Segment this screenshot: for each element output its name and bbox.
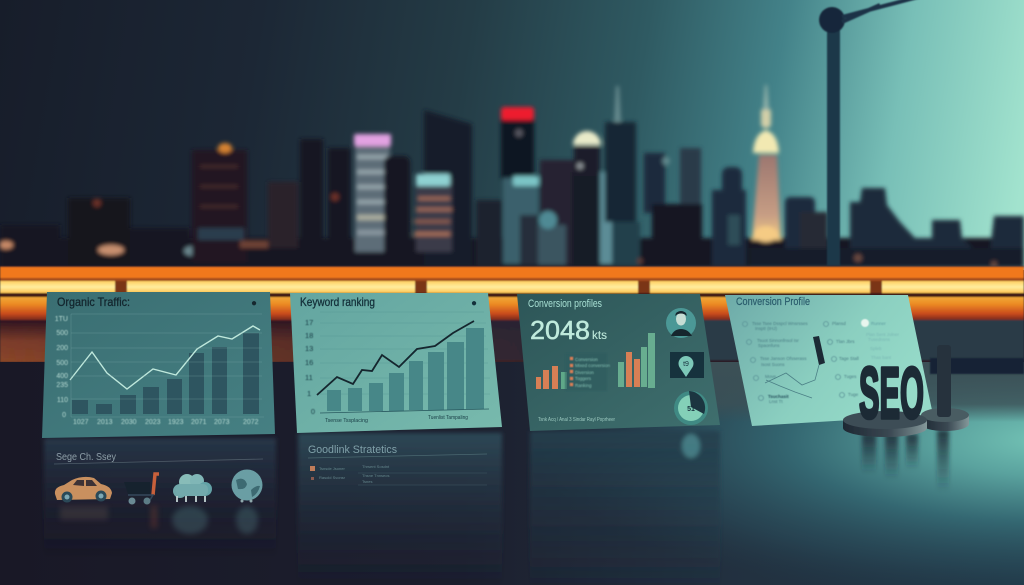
checklist: left column: Inspt! (tHJ) <box>755 326 778 331</box>
heading: keyword ranking: Keyword ranking <box>300 295 375 309</box>
checklist: right column <box>861 319 900 360</box>
checklist: left column: Move <box>765 374 777 379</box>
gridlines <box>320 312 490 394</box>
y axis labels: 500 <box>56 360 68 367</box>
icon: location pin tile: t9 <box>683 361 689 368</box>
icon: card controls: ● <box>471 298 477 309</box>
checklist: middle column: Tlan Jbrs <box>836 339 855 344</box>
legend rows: Thsne Tnnseos <box>362 473 390 478</box>
label: backlink strategies <box>308 444 487 485</box>
y axis labels: 1 <box>307 389 311 398</box>
line chart: keyword trend <box>317 321 474 395</box>
checklist: left column: Tsuot Sinnonfnsol Isr <box>757 338 799 343</box>
checklist: right column: Runner <box>871 321 886 326</box>
x axis captions: Tuenlist Tampaling <box>428 415 468 421</box>
x axis captions <box>325 415 468 424</box>
legend rows: Tsnes <box>362 479 372 484</box>
legend rows <box>310 464 487 485</box>
x axis labels <box>73 419 259 426</box>
background sky <box>0 0 1024 270</box>
icon: card controls: ● <box>251 298 257 309</box>
line chart: profile trend <box>765 365 819 398</box>
checklist: right column: Spleb <box>870 346 882 351</box>
panel: keyword ranking card <box>290 293 502 433</box>
checklist: middle column: Tuges <box>844 374 857 379</box>
x axis labels: 2073 <box>214 419 230 426</box>
x axis captions: Tsense Tssplacing <box>325 418 368 424</box>
glowing orange band <box>0 266 1024 366</box>
x axis labels: 2023 <box>145 419 161 426</box>
panel: organic traffic card <box>42 292 275 438</box>
legend <box>565 353 611 391</box>
big number: kts <box>592 328 607 342</box>
y axis labels: 16 <box>305 358 313 367</box>
checklist: right column: Thas bant <box>871 355 892 360</box>
checklist: middle column <box>824 321 859 398</box>
icon: shopping cart <box>124 474 159 504</box>
big number: 2048 <box>530 315 590 345</box>
right disc <box>921 408 969 431</box>
checklist: left column: Tsuchasit <box>768 394 789 399</box>
seo pillar <box>937 345 951 417</box>
city skyline <box>0 85 1024 268</box>
text: SEO <box>859 354 924 434</box>
legend: Conversion <box>575 357 598 362</box>
chart axes and gridlines <box>71 314 264 417</box>
checklist: middle column: Tuge <box>848 392 859 397</box>
caption: Tsnk Acq / Anal 3 Sindar Rayl Poprheer <box>538 417 615 423</box>
heading: conversion profiles: Conversion profiles <box>528 298 602 310</box>
icon: cloud <box>173 474 212 502</box>
chart baseline <box>320 409 489 413</box>
x axis labels: 2013 <box>97 419 113 426</box>
y axis labels <box>55 316 68 419</box>
y axis labels: 18 <box>305 331 313 340</box>
x axis labels: 2071 <box>191 419 207 426</box>
y axis labels: 11 <box>305 373 313 382</box>
dark reflective table <box>0 358 1024 585</box>
y axis labels: 13 <box>305 344 313 353</box>
y axis labels: 400 <box>56 373 68 380</box>
line chart: traffic trend <box>70 326 260 389</box>
checklist: left column <box>742 321 808 404</box>
street lamp pole <box>819 0 922 268</box>
dark slanted marker <box>813 336 825 365</box>
checklist: middle column: Tage Stall <box>839 356 859 361</box>
icon reflections <box>60 506 258 534</box>
checklist: left column: Tsse Tsee Dsspcl Wnsrsses <box>752 321 808 326</box>
y axis labels: 0 <box>62 412 66 419</box>
y axis labels: 500 <box>56 330 68 337</box>
y axis labels: 200 <box>56 345 68 352</box>
bar chart: large bars <box>618 333 655 388</box>
x axis labels: 1923 <box>168 419 184 426</box>
y axis labels: 110 <box>57 397 68 404</box>
legend: Mixed conversion <box>575 363 611 368</box>
x axis labels: 1027 <box>73 419 89 426</box>
base discs <box>843 408 969 437</box>
label: sege strategy <box>54 451 263 464</box>
legend: Ranking <box>575 383 592 388</box>
x axis labels: 2072 <box>243 419 259 426</box>
icon: location pin tile <box>670 352 704 378</box>
icon: pie chart: 51 <box>687 406 695 413</box>
bar chart: keyword bars <box>327 328 484 411</box>
left disc <box>843 411 927 437</box>
y axis labels: 17 <box>305 318 313 327</box>
label: backlink strategies: Goodlink Stratetics <box>308 444 397 456</box>
y axis labels: 1TU <box>55 316 68 323</box>
heading: organic traffic: Organic Traffic: <box>57 295 130 309</box>
checklist: left column: Spaonfuns <box>758 343 780 348</box>
icon: car <box>55 477 112 502</box>
heading: conversion profile: Conversion Profile <box>736 296 810 308</box>
label: sege strategy: Sege Ch. Ssey <box>56 451 117 463</box>
panel: conversion stats card <box>517 294 720 431</box>
legend rows: Tsnsde Jsoner <box>319 466 345 471</box>
legend rows: Rasold Svonsr <box>319 475 346 480</box>
legend rows: Thrsent Sosdnt <box>362 464 390 469</box>
icon: pie chart <box>674 391 708 425</box>
card reflections on table <box>44 430 949 585</box>
legend: Toggers <box>575 376 592 381</box>
checklist: right column: Plan Sent Jolner <box>866 332 900 337</box>
checklist: middle column: Plansd <box>832 321 846 326</box>
y axis labels: 0 <box>311 407 315 416</box>
bar chart: small bars <box>536 366 567 389</box>
legend: Diversion <box>575 370 594 375</box>
checklist: right column: Tusednsns <box>868 337 891 342</box>
icon: globe <box>232 470 262 502</box>
bar chart: traffic bars <box>72 333 259 414</box>
checklist: left column: Lnst Tt <box>769 399 783 404</box>
y axis labels <box>305 318 315 416</box>
x axis labels: 2030 <box>121 419 137 426</box>
checklist: left column: Isost Suons <box>761 362 785 367</box>
icon: user avatar <box>666 308 696 338</box>
panel: conversion profile card <box>725 295 933 426</box>
checklist: left column: Tsse Janson Ofsserass <box>760 356 807 361</box>
y axis labels: 235 <box>56 382 68 389</box>
